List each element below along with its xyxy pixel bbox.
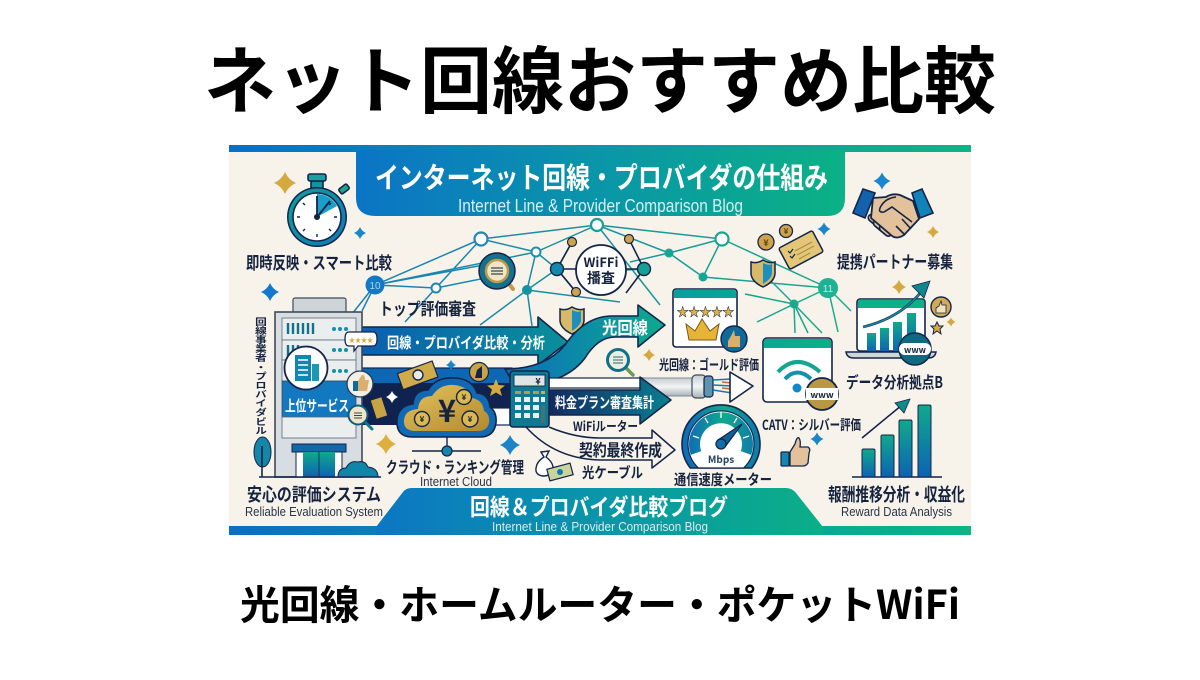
arrow: fiber ribbon: 光回線 — [602, 314, 648, 339]
node 10 — [366, 276, 384, 294]
icon: review window — [673, 289, 747, 352]
panel: bottom banner: Internet Line & Provider Comparison Blog — [492, 520, 708, 534]
panel: bottom banner — [376, 488, 823, 535]
icon: coins and checklist: ¥ — [784, 226, 789, 237]
icon: wifi window — [763, 338, 838, 410]
label: reliable evaluation: Reliable Evaluation System — [245, 504, 383, 519]
icon: shield right — [751, 260, 775, 287]
icon: bush — [338, 462, 378, 477]
icon: cloud: ¥ — [468, 414, 473, 425]
icon: wifi window: www — [810, 388, 834, 401]
icon: blue sparkle cloud — [500, 435, 520, 455]
chart: rising bars — [852, 399, 942, 477]
label: partners: 提携パートナー募集 — [837, 248, 953, 273]
icon: thumbs up — [781, 438, 810, 466]
icon: white sparkle — [386, 391, 398, 403]
panel: title banner: インターネット回線・プロバイダの仕組み — [375, 155, 828, 197]
network lines — [352, 219, 851, 333]
panel: title banner: Internet Line & Provider Comparison Blog — [458, 196, 743, 216]
label: speed meter: 通信速度メーター — [674, 469, 772, 490]
icon: blue sparkle catv — [810, 432, 824, 446]
icon: cloud — [397, 378, 496, 456]
icon: blue sparkle large — [261, 283, 279, 301]
icon: blue sparkle band — [446, 360, 456, 370]
icon: blue sparkle — [354, 227, 366, 239]
arrow: contract: 契約最終作成 — [579, 437, 662, 461]
icon: gold sparkle chart — [892, 280, 906, 294]
label: reliable evaluation — [245, 481, 383, 519]
panel: building — [275, 298, 362, 477]
label: reward analysis — [828, 481, 965, 519]
icon: rating bubble — [345, 332, 377, 351]
icon: gold sparkle cloud — [376, 434, 396, 454]
icon: calculator: ¥ — [535, 374, 541, 388]
icon: handshake — [853, 189, 933, 238]
panel: title banner — [356, 150, 845, 216]
icon: fiber cable — [549, 372, 753, 402]
label: data base: データ分析拠点B — [846, 369, 943, 393]
icon: calculator — [510, 371, 549, 427]
icon: cloud: ¥ — [420, 414, 425, 425]
label: fiber cable: 光ケーブル — [582, 462, 643, 483]
icon: shield left — [560, 307, 584, 334]
subtitle: 光回線・ホームルーター・ポケットWiFi — [240, 573, 960, 631]
label: cloud ranking: Internet Cloud — [420, 474, 492, 489]
label: reward analysis: Reward Data Analysis — [841, 505, 952, 519]
title: ネット回線おすすめ比較 — [204, 23, 996, 129]
icon: chart laptop — [846, 281, 951, 365]
icon: company circle — [284, 346, 328, 390]
top gradient band — [229, 145, 971, 152]
label: gold rating: 光回線：ゴールド評価 — [659, 355, 759, 375]
icon: coins and checklist: ¥ — [763, 236, 769, 249]
icon: money bag — [536, 451, 573, 481]
icon: wolf coin — [470, 362, 488, 382]
label: wifi router: WiFiルーター — [573, 416, 638, 435]
label: reward analysis: 報酬推移分析・収益化 — [828, 481, 965, 507]
label: cloud ranking: クラウド・ランキング管理 — [386, 454, 524, 478]
icon: gold sparkle small — [946, 318, 956, 326]
icon: WiFi search hub: WiFFi — [583, 252, 619, 271]
label: cloud ranking — [386, 454, 524, 489]
arrow: contract — [526, 427, 675, 468]
icon: magnifier building — [348, 406, 372, 429]
icon: WiFi search hub: 播査 — [587, 268, 615, 288]
node 11 — [818, 278, 838, 298]
panel: dark flow band — [362, 368, 512, 425]
icon: tree — [254, 437, 271, 477]
panel: bottom banner: 回線＆プロバイダ比較ブログ — [470, 488, 728, 522]
network nodes — [432, 219, 798, 308]
node 10: 10 — [369, 281, 381, 292]
icon: speed meter: Mbps — [708, 451, 734, 466]
icon: stopwatch — [287, 174, 350, 247]
arrow: plan review: 料金プラン審査集計 — [555, 392, 654, 413]
arrow: fiber ribbon — [505, 305, 665, 386]
ground line — [259, 476, 381, 478]
arrow: plan review — [549, 377, 671, 424]
icon: blue sparkle handshake — [874, 172, 890, 190]
icon: speed meter — [682, 405, 760, 468]
icon: rating bubble: ★★★★ — [349, 336, 373, 344]
panel: infographic — [229, 145, 971, 535]
icon: coins and checklist — [758, 224, 823, 270]
label: premium service: 上位サービス — [285, 395, 349, 416]
icon: gold tickets — [370, 361, 438, 419]
label: silver rating: CATV：シルバー評価 — [762, 415, 861, 435]
icon: magnifier center — [608, 350, 633, 375]
icon: magnifier top — [479, 253, 515, 289]
icon: gold sparkle center — [643, 349, 655, 361]
bottom gradient band — [229, 526, 971, 535]
icon: gold sparkle — [274, 172, 296, 194]
arrow: line comparison — [362, 317, 568, 365]
icon: cloud: ¥ — [462, 392, 467, 403]
icon: blue sparkle right — [818, 222, 830, 236]
icon: review window: ★★★★★ — [677, 305, 734, 319]
label: top review: トップ評価審査 — [379, 295, 476, 320]
icon: cloud: ¥ — [438, 386, 456, 431]
icon: thumb bubble — [347, 371, 373, 397]
arrow: line comparison: 回線・プロバイダ比較・分析 — [387, 332, 545, 353]
icon: WiFi search hub — [550, 234, 650, 296]
icon: gold star — [487, 379, 505, 396]
label: smart compare: 即時反映・スマート比較 — [246, 249, 392, 274]
node 11: 11 — [823, 284, 834, 295]
label: vertical building: 回線事業者・プロバイダビル — [253, 317, 269, 435]
icon: gold sparkle handshake — [927, 226, 939, 238]
icon: chart laptop: www — [904, 344, 927, 356]
label: reliable evaluation: 安心の評価システム — [247, 481, 381, 507]
